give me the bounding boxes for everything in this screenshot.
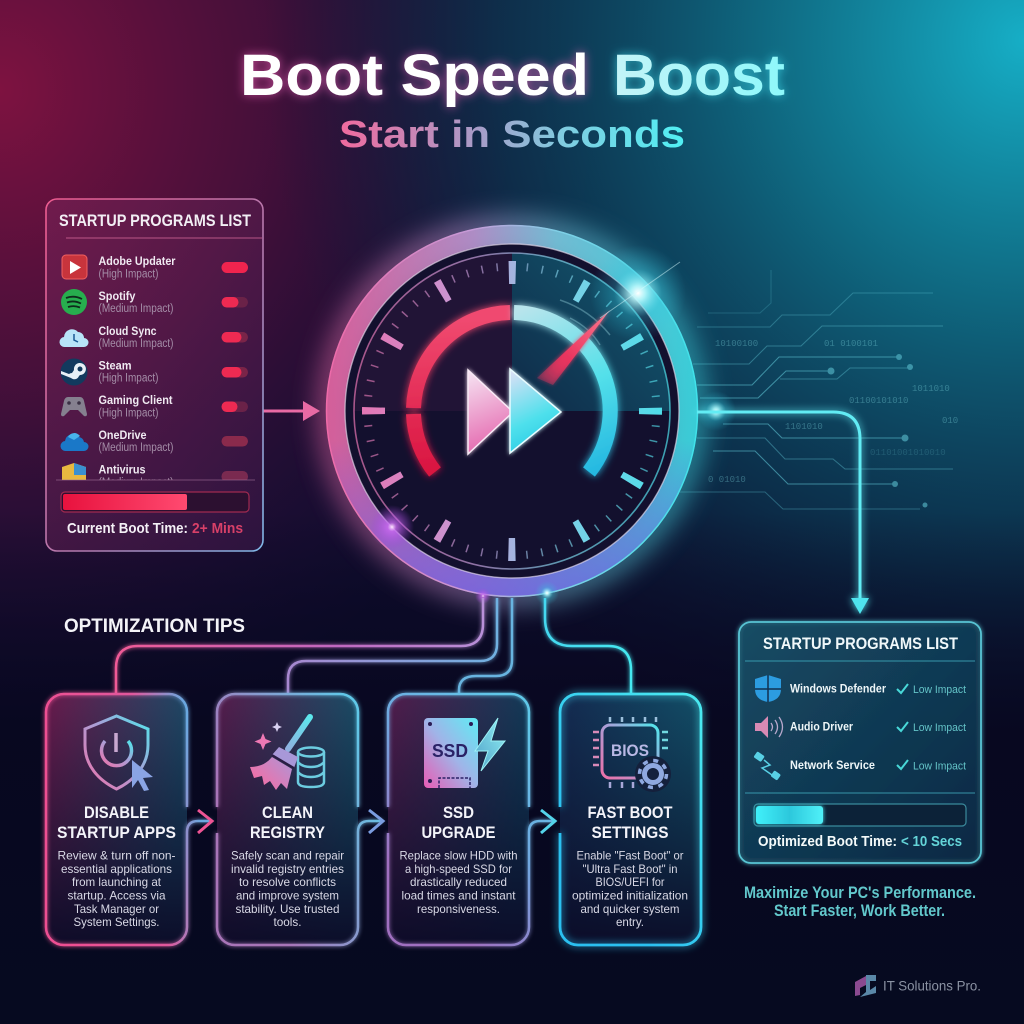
heading: STARTUP PROGRAMS LIST bbox=[763, 634, 959, 653]
panel: optimized startup programs: Audio Driver bbox=[790, 720, 853, 734]
card: ssd upgrade bbox=[388, 694, 555, 945]
icon: shield with power and cursor bbox=[85, 716, 153, 791]
toggle bbox=[222, 332, 248, 342]
description: from launching at bbox=[72, 875, 162, 889]
light flares bbox=[370, 245, 736, 605]
icon: antivirus bbox=[62, 463, 86, 481]
description: Review & turn off non- bbox=[58, 848, 176, 862]
card: fast boot settings bbox=[560, 694, 701, 945]
tagline: Maximize Your PC's Performance. bbox=[744, 883, 976, 902]
card: disable startup apps bbox=[46, 694, 212, 945]
description: Replace slow HDD with bbox=[400, 848, 518, 862]
circuit lines and binary decoration bbox=[680, 270, 958, 509]
program rows: Gaming Client bbox=[98, 393, 172, 407]
description: stability. Use trusted bbox=[236, 902, 340, 916]
gauge bbox=[326, 226, 736, 605]
cyan arc bbox=[514, 312, 610, 472]
title bbox=[588, 803, 673, 842]
description bbox=[400, 848, 518, 916]
icon: steam bbox=[60, 358, 88, 386]
description: System Settings. bbox=[74, 915, 160, 929]
panel: optimized startup programs: Network Service bbox=[790, 758, 875, 772]
description bbox=[231, 848, 344, 929]
ring outer edge bbox=[326, 226, 698, 596]
arrow: startup list to gauge bbox=[263, 401, 320, 421]
description: to resolve conflicts bbox=[239, 875, 336, 889]
icon: windows defender shield bbox=[755, 675, 781, 702]
icon: network service bbox=[753, 751, 781, 781]
major ticks bbox=[374, 272, 650, 550]
optimized boot time: Optimized Boot Time: bbox=[758, 833, 897, 850]
dial face bbox=[344, 243, 680, 579]
minor ticks bbox=[368, 266, 656, 556]
icon: gamepad bbox=[61, 397, 87, 416]
toggle bbox=[222, 367, 248, 378]
tagline: Start Faster, Work Better. bbox=[774, 901, 945, 920]
description: BIOS/UEFI for bbox=[596, 875, 664, 889]
current boot time: 2+ Mins bbox=[192, 520, 243, 537]
program rows: (Medium Impact) bbox=[98, 477, 174, 489]
program rows: Cloud Sync bbox=[98, 324, 157, 338]
circuit lines and binary decoration: 10100100 bbox=[715, 339, 758, 349]
panel: optimized startup programs bbox=[739, 622, 981, 863]
outer ring bbox=[336, 234, 688, 588]
icon: onedrive bbox=[60, 433, 88, 451]
logo: IT Solutions Pro. bbox=[883, 978, 981, 994]
thin inner ring bbox=[354, 253, 670, 569]
description: a high-speed SSD for bbox=[405, 862, 512, 876]
description: load times and instant bbox=[402, 888, 516, 902]
icon: cloud sync bbox=[59, 329, 88, 347]
program rows: (High Impact) bbox=[98, 372, 159, 384]
description: and quicker system bbox=[580, 902, 680, 916]
title: UPGRADE bbox=[422, 823, 496, 842]
circuit lines and binary decoration: 1101010 bbox=[785, 422, 823, 432]
description: optimized initialization bbox=[572, 888, 688, 902]
program rows: Adobe Updater bbox=[98, 254, 176, 268]
arrow bbox=[369, 810, 383, 833]
arrow: gauge to optimized panel bbox=[697, 412, 869, 614]
panel: startup programs list bbox=[46, 199, 263, 551]
program rows: Steam bbox=[98, 358, 132, 372]
subtitle: Start in Seconds bbox=[339, 114, 685, 156]
red arc bbox=[414, 312, 510, 472]
card: clean registry bbox=[217, 694, 383, 945]
title: DISABLE bbox=[84, 803, 149, 822]
program rows: (Medium Impact) bbox=[98, 303, 174, 315]
title bbox=[422, 803, 496, 842]
panel: optimized startup programs: Windows Defender bbox=[790, 682, 886, 696]
circuit lines and binary decoration: 01 0100101 bbox=[824, 339, 878, 349]
fast forward icon bbox=[468, 369, 561, 454]
title: Boot Speed bbox=[240, 43, 589, 108]
title: REGISTRY bbox=[250, 823, 326, 842]
description bbox=[572, 848, 688, 929]
title bbox=[57, 803, 176, 842]
needle motion streaks bbox=[560, 300, 610, 345]
description: "Ultra Fast Boot" in bbox=[582, 862, 678, 876]
program rows: OneDrive bbox=[98, 428, 147, 442]
description: essential applications bbox=[61, 862, 172, 876]
circuit lines and binary decoration: 01100101010 bbox=[849, 396, 908, 406]
title: SETTINGS bbox=[592, 823, 668, 842]
description: invalid registry entries bbox=[231, 862, 344, 876]
icon: broom and database bbox=[250, 717, 324, 790]
heading: STARTUP PROGRAMS LIST bbox=[59, 211, 252, 230]
icon: bios chip and gear bbox=[593, 717, 671, 792]
icon: adobe updater bbox=[62, 255, 87, 279]
arrow bbox=[541, 810, 555, 833]
description: drastically reduced bbox=[410, 875, 507, 889]
card border bbox=[560, 694, 701, 945]
description: startup. Access via bbox=[68, 888, 166, 902]
program rows: (High Impact) bbox=[98, 268, 159, 280]
description: and improve system bbox=[236, 888, 339, 902]
icon: audio speaker bbox=[755, 716, 782, 738]
title: CLEAN bbox=[262, 803, 313, 822]
low impact check: Low Impact bbox=[913, 722, 966, 734]
program rows: Antivirus bbox=[98, 462, 146, 476]
toggle bbox=[222, 297, 248, 308]
title bbox=[240, 43, 785, 108]
toggle bbox=[222, 471, 248, 480]
card border and arrow bbox=[217, 694, 382, 945]
dial upper left quadrant bbox=[354, 253, 512, 411]
heading: optimization tips: OPTIMIZATION TIPS bbox=[64, 616, 245, 637]
toggle bbox=[222, 436, 248, 446]
description bbox=[58, 848, 176, 929]
title: STARTUP APPS bbox=[57, 823, 176, 842]
toggle bbox=[222, 262, 248, 273]
program rows: (Medium Impact) bbox=[98, 338, 174, 350]
title: FAST BOOT bbox=[588, 803, 673, 822]
arrow bbox=[198, 810, 212, 833]
title: Boost bbox=[613, 43, 785, 108]
program rows: (High Impact) bbox=[98, 408, 159, 420]
toggle bbox=[222, 402, 248, 412]
connector lines bbox=[116, 598, 631, 695]
description: Enable "Fast Boot" or bbox=[576, 848, 684, 862]
circuit lines and binary decoration: 010 bbox=[942, 416, 958, 426]
outer ring glow bbox=[330, 229, 694, 593]
ring bottom shade bbox=[336, 234, 688, 588]
icon: spotify bbox=[61, 289, 87, 315]
low impact check: Low Impact bbox=[913, 684, 966, 696]
icon: ssd with bolt bbox=[424, 718, 505, 788]
title bbox=[250, 803, 326, 842]
tagline bbox=[744, 883, 976, 920]
low impact check: Low Impact bbox=[913, 760, 966, 772]
current boot time: Current Boot Time: bbox=[67, 520, 188, 537]
circuit lines and binary decoration: 1011010 bbox=[912, 384, 950, 394]
program rows: Spotify bbox=[98, 289, 136, 303]
dial upper right quadrant bbox=[512, 253, 670, 411]
description: responsiveness. bbox=[417, 902, 500, 916]
description: entry. bbox=[616, 915, 644, 929]
optimized boot time: < 10 Secs bbox=[901, 833, 962, 850]
card border and arrow bbox=[388, 694, 553, 945]
description: tools. bbox=[274, 915, 302, 929]
circuit lines and binary decoration: 0 01010 bbox=[708, 475, 746, 485]
title: SSD bbox=[443, 803, 474, 822]
progress bar bbox=[754, 804, 966, 826]
program rows bbox=[59, 254, 248, 489]
circuit lines and binary decoration: 01101001010010 bbox=[870, 448, 946, 458]
needle bbox=[537, 310, 610, 385]
ring inner edge bbox=[345, 244, 679, 578]
description: Task Manager or bbox=[74, 902, 159, 916]
logo bbox=[855, 975, 981, 997]
card border and arrow bbox=[46, 694, 211, 945]
program rows: (Medium Impact) bbox=[98, 442, 174, 454]
progress bar bbox=[61, 492, 249, 512]
description: Safely scan and repair bbox=[231, 848, 344, 862]
icon: bios chip and gear: BIOS bbox=[611, 741, 649, 760]
icon: ssd with bolt: SSD bbox=[432, 741, 468, 761]
